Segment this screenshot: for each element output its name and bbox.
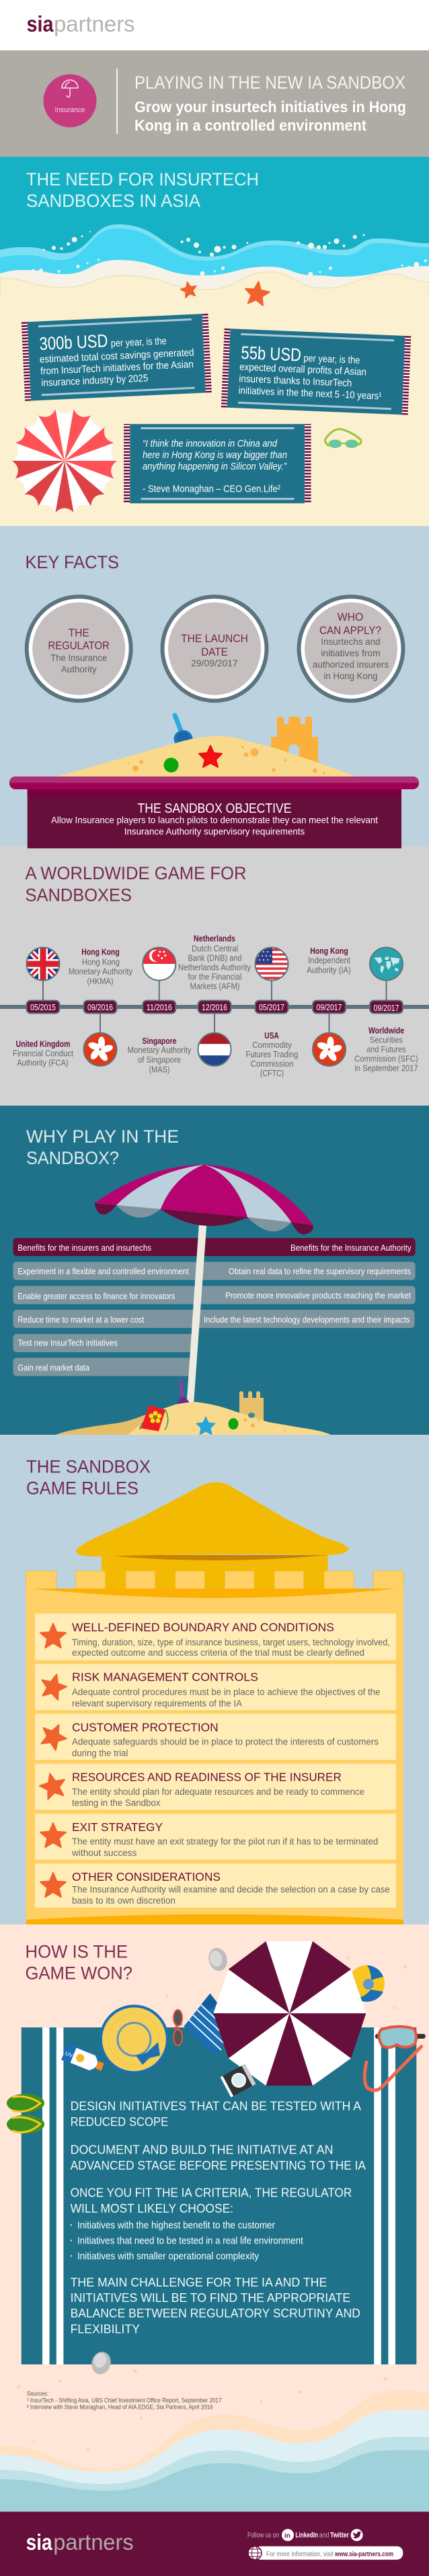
icon: snorkel and mask xyxy=(364,2027,426,2090)
panel: key facts xyxy=(0,526,429,848)
benefits table xyxy=(13,1238,416,1376)
rule card: resources and readiness: RESOURCES AND READINESS OF THE INSURER xyxy=(72,1771,342,1784)
benefits table: Test new InsurTech initiatives xyxy=(17,1338,118,1348)
text block: winning conditions: FLEXIBILITY xyxy=(71,2323,140,2336)
circle: the regulator xyxy=(25,594,133,703)
heading xyxy=(26,169,259,211)
icon: red bucket xyxy=(140,1405,168,1431)
benefits table: Gain real market data xyxy=(17,1362,90,1373)
panel: why play in the sandbox xyxy=(0,1106,429,1435)
social links: Follow us on xyxy=(247,2532,279,2540)
rule card: risk management xyxy=(35,1664,396,1710)
label: Netherlands: Netherlands xyxy=(194,934,235,944)
flag: United Kingdom xyxy=(26,947,60,981)
flag: Singapore xyxy=(143,947,176,981)
icon: sun hat xyxy=(101,2006,167,2073)
text block: winning conditions: REDUCED SCOPE xyxy=(71,2115,168,2129)
logo: Sia Partners: partners xyxy=(54,11,135,36)
towel: 300b USD: insurance industry by 2025 xyxy=(41,373,149,389)
icon: sand island with toys xyxy=(56,1381,331,1435)
label: USA: Commodity xyxy=(252,1040,292,1050)
timeline axis with dates: 09/2016 xyxy=(87,1002,113,1012)
towel: 55b USD: expected overall profits of Asian xyxy=(239,361,366,378)
social links xyxy=(247,2529,363,2541)
sandbox with objective: Allow Insurance players to launch pilots to demonstrate they can meet the relevant xyxy=(51,815,378,826)
rule card: exit strategy xyxy=(35,1814,396,1860)
timeline axis with dates: 09/2017 xyxy=(374,1003,399,1013)
heading xyxy=(26,1457,151,1498)
towel: 55b USD: initiatives in the the next 5 -10 years¹ xyxy=(238,385,382,402)
towel: 55b USD: 55b USD xyxy=(241,343,302,365)
label: Netherlands: Netherlands Authority xyxy=(178,963,251,973)
towel: quote: - Steve Monaghan – CEO Gen.Life² xyxy=(143,484,280,495)
logo: Sia Partners: sia xyxy=(27,11,54,36)
circle: who can apply: Insurtechs and xyxy=(321,637,381,647)
website link xyxy=(248,2546,403,2560)
circle: who can apply: WHO xyxy=(338,611,363,623)
circle: the regulator: THE xyxy=(69,627,89,639)
sea waves xyxy=(0,2390,429,2512)
social links: Twitter xyxy=(330,2532,350,2540)
flag: Hong Kong xyxy=(83,1032,117,1066)
icon: swimming goggles xyxy=(325,429,361,447)
subtitle: Kong in a controlled environment xyxy=(134,117,366,134)
text block: winning conditions: ONCE YOU FIT THE IA CRITERIA, THE REGULATOR xyxy=(71,2186,352,2200)
towel: quote: anything happening in Silicon Valley.” xyxy=(143,461,287,472)
timeline axis with dates: 05/2015 xyxy=(30,1002,56,1012)
sandbox with objective: Insurance Authority supervisory requirements xyxy=(124,826,305,837)
label: Singapore: Monetary Authority xyxy=(128,1046,192,1055)
sources xyxy=(27,2391,222,2411)
heading xyxy=(26,1941,132,1984)
circle: who can apply xyxy=(297,594,405,703)
icon: blue star xyxy=(196,1417,215,1435)
icon: parasol seen from above xyxy=(12,409,117,513)
panel: title banner xyxy=(0,50,429,157)
flag: Netherlands xyxy=(198,1032,231,1067)
rule card: boundary and conditions: WELL-DEFINED BOUNDARY AND CONDITIONS xyxy=(72,1620,334,1634)
text block: winning conditions: BALANCE BETWEEN REGULATORY SCRUTINY AND xyxy=(71,2307,360,2320)
flag: USA xyxy=(255,947,288,981)
text block: winning conditions xyxy=(71,2100,366,2336)
label: Netherlands: Dutch Central xyxy=(192,944,238,954)
icon: beach ball xyxy=(348,1965,385,2002)
rule card: risk management: relevant supervisory requirements of the IA xyxy=(72,1698,242,1708)
icon: small starfish xyxy=(179,280,198,299)
towel: 300b USD: estimated total cost savings generated xyxy=(39,347,194,365)
heading: SANDBOXES xyxy=(26,885,132,905)
circle: the launch date: DATE xyxy=(201,646,228,658)
benefits table: Benefits for the insurers and insurtechs xyxy=(17,1243,151,1253)
icon: green ball xyxy=(164,758,179,772)
subtitle: Grow your insurtech initiatives in Hong xyxy=(134,98,406,116)
label: United Kingdom: Financial Conduct xyxy=(13,1049,73,1059)
towel: 300b USD: per year, is the xyxy=(110,335,167,349)
label: United Kingdom: Authority (FCA) xyxy=(17,1059,69,1068)
label: USA: Commission xyxy=(250,1059,294,1069)
rule card: customer protection: Adequate safeguards should be in place to protect the interests of customers xyxy=(72,1736,379,1746)
icon: castle xyxy=(235,1391,264,1427)
icon: LinkedIn xyxy=(282,2529,294,2541)
icon: parasol seen from above xyxy=(213,1941,366,2086)
rule card: customer protection: during the trial xyxy=(72,1748,128,1758)
timeline axis with dates: 09/2017 xyxy=(316,1002,342,1012)
sandbox with objective: THE SANDBOX OBJECTIVE xyxy=(137,801,292,816)
rule card: boundary and conditions xyxy=(35,1613,396,1660)
icon: rolled striped towel xyxy=(184,1994,233,2057)
icon: insurance badge xyxy=(43,74,97,128)
icon: sunscreen bottle xyxy=(61,2043,106,2075)
rule card: risk management: RISK MANAGEMENT CONTROLS xyxy=(72,1671,258,1684)
rule card: boundary and conditions: expected outcome and success criteria of the trial must be clearly defined xyxy=(72,1648,364,1658)
circle: who can apply: initiatives from xyxy=(321,648,381,658)
label: Netherlands: Markets (AFM) xyxy=(190,982,239,991)
sand pile with toys xyxy=(57,736,356,776)
label: USA: USA xyxy=(264,1031,279,1040)
panel: worldwide game xyxy=(0,846,429,1106)
decorative sand dots xyxy=(17,1956,407,2451)
flag: Hong Kong xyxy=(312,1032,346,1066)
benefits table: Reduce time to market at a lower cost xyxy=(17,1315,145,1325)
icon: world globe xyxy=(370,947,403,981)
heading: A WORLDWIDE GAME FOR xyxy=(26,863,246,883)
label: Worldwide xyxy=(354,1026,418,1073)
label: Netherlands: for the Financial xyxy=(188,973,242,982)
label: USA: (CFTC) xyxy=(260,1069,284,1078)
circle: who can apply: authorized insurers xyxy=(313,660,389,670)
panel: need for insurtech sandboxes xyxy=(0,157,429,531)
label: Hong Kong IA: Authority (IA) xyxy=(307,966,351,975)
text block: winning conditions: ADVANCED STAGE BEFORE PRESENTING TO THE IA xyxy=(71,2159,366,2172)
logo: Sia Partners: partners xyxy=(53,2530,134,2555)
label: Hong Kong IA: Independent xyxy=(308,956,350,965)
circle: the regulator: REGULATOR xyxy=(48,640,110,652)
label: Singapore: Singapore xyxy=(143,1036,177,1046)
heading: THE SANDBOX xyxy=(26,1457,151,1477)
rule card: exit strategy: EXIT STRATEGY xyxy=(72,1820,163,1834)
heading xyxy=(26,1126,179,1168)
label: Hong Kong HKMA xyxy=(69,948,133,986)
benefits table: Experiment in a flexible and controlled environment xyxy=(17,1266,189,1276)
sandcastle with rules xyxy=(26,1482,403,1924)
benefits table: Enable greater access to finance for innovators xyxy=(17,1291,176,1301)
rule card: other considerations: OTHER CONSIDERATIONS xyxy=(72,1870,221,1883)
text block: winning conditions: THE MAIN CHALLENGE FOR THE IA AND THE xyxy=(71,2276,327,2289)
icon: shell xyxy=(206,1946,230,1973)
icon: sunscreen bottle: UV xyxy=(65,2050,74,2059)
subtitle xyxy=(134,98,406,134)
icon: large starfish xyxy=(243,280,271,306)
social links: and xyxy=(319,2532,329,2540)
label: Hong Kong IA xyxy=(307,946,351,975)
sources: Sources: xyxy=(27,2391,48,2398)
rule card: boundary and conditions: Timing, duration, size, type of insurance business, target users, technology involved, xyxy=(72,1637,390,1647)
icon: red star toy xyxy=(199,746,222,767)
text block: winning conditions: DESIGN INITIATIVES THAT CAN BE TESTED WITH A xyxy=(71,2100,361,2113)
sources: ² Interview with Steve Monaghan, Head of AIA EDGE, Sia Partners, April 2016 xyxy=(27,2404,213,2411)
label: United Kingdom xyxy=(13,1040,73,1068)
icon: shell xyxy=(89,2350,113,2377)
label: Worldwide: and Futures xyxy=(366,1045,406,1055)
rule card: risk management: Adequate control procedures must be in place to achieve the objectives of the xyxy=(72,1687,381,1697)
icon: insurance badge: Insurance xyxy=(55,106,85,114)
rule card: resources and readiness: The entity should plan for adequate resources and be ready to commence xyxy=(72,1787,364,1797)
towel: 55b USD: per year, is the xyxy=(303,353,360,366)
text block: winning conditions: DOCUMENT AND BUILD THE INITIATIVE AT AN xyxy=(71,2143,334,2157)
label: Hong Kong HKMA: Hong Kong xyxy=(82,958,120,967)
logo: Sia Partners: sia xyxy=(26,2530,52,2555)
label: USA: Futures Trading xyxy=(246,1050,299,1059)
rule card: other considerations: The Insurance Authority will examine and decide the selection on a case by case xyxy=(72,1884,390,1894)
rule card: resources and readiness xyxy=(35,1764,396,1810)
circle: the launch date: 29/09/2017 xyxy=(191,658,238,668)
towel: quote: “I think the innovation in China and xyxy=(143,438,278,449)
timeline axis with dates: 12/2016 xyxy=(202,1002,227,1012)
circle: the launch date: THE LAUNCH xyxy=(181,633,248,645)
icon: camera xyxy=(221,2064,256,2097)
heading: SANDBOXES IN ASIA xyxy=(26,191,200,211)
rule card: other considerations xyxy=(35,1863,396,1908)
timeline axis with dates: 05/2017 xyxy=(259,1002,284,1012)
heading: THE NEED FOR INSURTECH xyxy=(26,169,259,189)
timeline axis with dates xyxy=(0,981,429,1032)
rule card: exit strategy: without success xyxy=(71,1848,137,1858)
heading: GAME WON? xyxy=(26,1963,132,1984)
sandbox with objective xyxy=(9,776,419,848)
icon: purple shovel xyxy=(178,1381,190,1413)
icon: globe xyxy=(248,2546,262,2560)
rule card: customer protection xyxy=(35,1714,396,1760)
beach towel xyxy=(22,2027,416,2364)
panel: footer xyxy=(0,2512,429,2576)
panel: how is the game won xyxy=(0,1924,429,2512)
label: Singapore: (MAS) xyxy=(149,1065,169,1075)
heading: HOW IS THE xyxy=(26,1941,128,1961)
text block: winning conditions: INITIATIVES WILL BE TO FIND THE APPROPRIATE xyxy=(71,2291,350,2305)
towel: 300b USD xyxy=(22,314,212,401)
circle: the launch date xyxy=(160,594,269,703)
heading: SANDBOX? xyxy=(26,1148,119,1168)
label: Worldwide: Securities xyxy=(370,1036,403,1045)
label: USA xyxy=(246,1031,299,1078)
heading: KEY FACTS xyxy=(26,552,119,572)
label: Netherlands: Bank (DNB) and xyxy=(188,954,242,963)
icon: sunglasses xyxy=(173,2010,182,2045)
circle: the regulator: The Insurance xyxy=(50,653,107,663)
icon: LinkedIn: in xyxy=(284,2532,290,2540)
circle: who can apply: in Hong Kong xyxy=(324,671,378,681)
social links: LinkedIn xyxy=(295,2532,318,2540)
rule card: other considerations: basis to its own discretion xyxy=(72,1896,176,1906)
heading xyxy=(26,863,246,905)
panel: sandbox game rules xyxy=(0,1435,429,1924)
bullet list xyxy=(71,2220,303,2262)
icon: green ball xyxy=(229,1418,238,1429)
website link: For more information, visit xyxy=(266,2551,334,2559)
circle: who can apply: CAN APPLY? xyxy=(319,625,381,637)
label: Singapore xyxy=(128,1036,192,1075)
towel: 55b USD: insurers thanks to InsurTech xyxy=(239,373,352,389)
towel: 300b USD: from InsurTech initiatives for the Asian xyxy=(40,359,194,377)
icon: flip flops xyxy=(7,2094,44,2133)
towel: 55b USD xyxy=(221,328,411,415)
towel: quote: here in Hong Kong is way bigger than xyxy=(143,449,287,461)
circle: the regulator: Authority xyxy=(61,664,97,674)
towel: 300b USD: 300b USD xyxy=(39,330,108,354)
website link: www.sia-partners.com xyxy=(334,2551,393,2559)
icon: sandcastle xyxy=(271,717,318,769)
bullet list: Initiatives that need to be tested in a real life environment xyxy=(77,2235,303,2246)
label: United Kingdom: United Kingdom xyxy=(16,1040,70,1049)
timeline axis with dates: 11/2016 xyxy=(147,1002,172,1012)
text block: winning conditions: WILL MOST LIKELY CHOOSE: xyxy=(71,2202,233,2215)
heading: GAME RULES xyxy=(26,1478,139,1498)
panel: sand with statistics xyxy=(0,280,429,526)
label: Hong Kong HKMA: Monetary Authority xyxy=(69,967,133,977)
towel: quote xyxy=(124,424,311,503)
label: Hong Kong HKMA: Hong Kong xyxy=(81,948,120,957)
label: Worldwide: in September 2017 xyxy=(354,1064,418,1073)
rule card: exit strategy: The entity must have an exit strategy for the pilot run if it has to be terminated xyxy=(72,1836,378,1847)
icon: Twitter xyxy=(351,2529,363,2541)
rule card: resources and readiness: testing in the Sandbox xyxy=(72,1797,161,1808)
heading: WHY PLAY IN THE xyxy=(26,1126,179,1147)
rule card: customer protection: CUSTOMER PROTECTION xyxy=(72,1721,219,1734)
bullet list: Initiatives with smaller operational complexity xyxy=(77,2251,260,2262)
sources: ¹ InsurTech - Shifting Asia, UBS Chief Investment Office Report, September 2017 xyxy=(27,2397,222,2405)
icon: blue shovel xyxy=(173,715,192,748)
label: Hong Kong IA: Hong Kong xyxy=(310,946,348,956)
label: Netherlands xyxy=(178,934,251,991)
label: Worldwide: Commission (SFC) xyxy=(354,1055,418,1064)
bullet list: Initiatives with the highest benefit to the customer xyxy=(77,2220,275,2231)
icon: beach umbrella xyxy=(94,1165,313,1404)
beach waves xyxy=(0,224,429,531)
label: Singapore: of Singapore xyxy=(138,1055,181,1065)
label: Hong Kong HKMA: (HKMA) xyxy=(87,977,113,986)
label: Worldwide: Worldwide xyxy=(368,1026,404,1036)
benefits table: Benefits for the Insurance Authority xyxy=(290,1243,412,1253)
